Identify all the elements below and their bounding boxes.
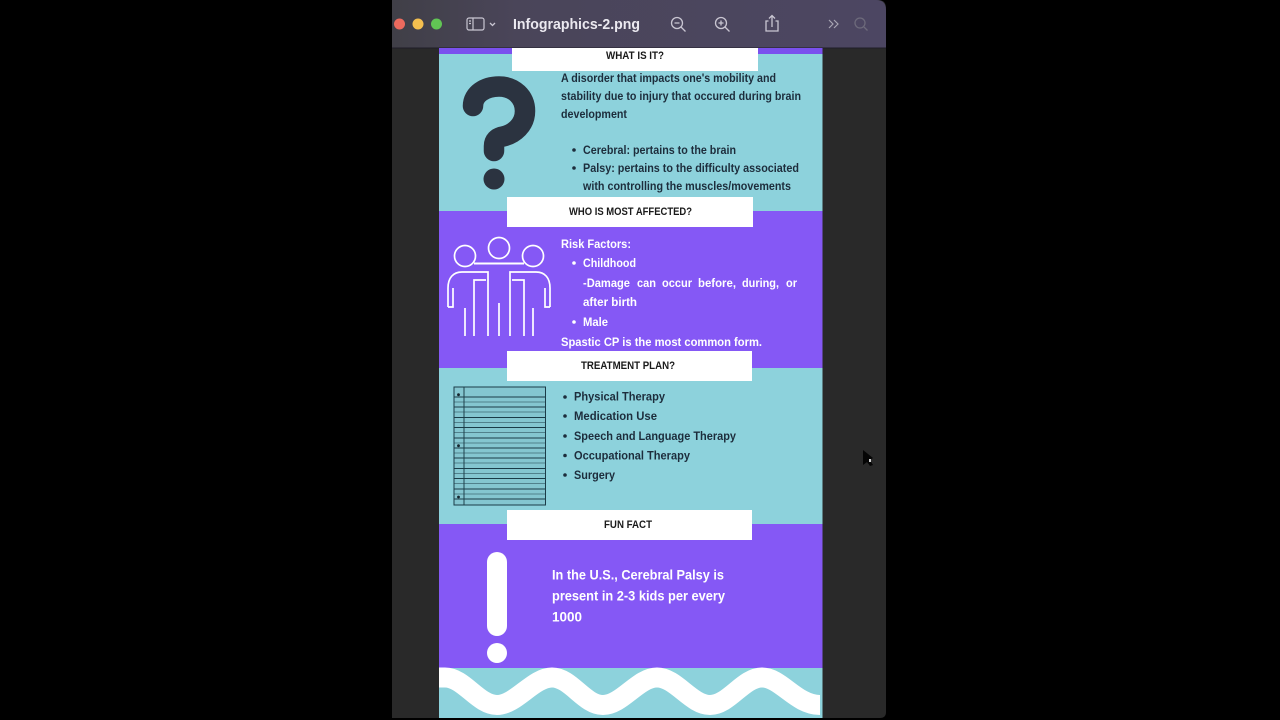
risk factors text: Male [583,315,608,329]
risk factors text: -Damage [583,276,630,290]
treatment list: Surgery [574,468,615,482]
risk factors text: Spastic CP is the most common form. [561,335,762,349]
fun fact text: In the U.S., Cerebral Palsy is [552,566,724,582]
risk factors text: before, [698,276,736,290]
heading: what is it: WHAT IS IT? [606,50,664,62]
section: treatment plan [439,351,822,524]
icon: zoom out [672,18,686,32]
risk factors text: after birth [583,295,637,309]
risk factors text [561,237,797,349]
heading: fun fact: FUN FACT [604,519,652,531]
icon: exclamation mark [487,552,507,663]
risk factors text: occur [662,276,692,290]
heading: what is it [512,48,758,71]
definition text [561,71,801,193]
icon: sidebar toggle [467,18,495,30]
icon: more chevrons [829,20,838,28]
risk factors text: Risk Factors: [561,237,631,251]
treatment list: Speech and Language Therapy [574,429,736,443]
definition text: A disorder that impacts one's mobility and [561,71,776,85]
heading: fun fact [507,510,752,540]
risk factors text: Childhood [583,256,636,270]
section: who is most affected [439,197,822,368]
window title: Infographics-2.png [513,17,640,33]
risk factors text: or [786,276,797,290]
icon: search [855,18,868,30]
definition text: stability due to injury that occured during brain [561,89,801,103]
definition text: Cerebral: pertains to the brain [583,143,736,157]
icon: share [766,16,778,31]
definition text: Palsy: pertains to the difficulty associated [583,161,799,175]
icon: zoom in [716,18,730,32]
fun fact text: 1000 [552,608,582,624]
heading: treatment plan: TREATMENT PLAN? [581,360,675,372]
window controls [394,18,442,30]
risk factors text: can [637,276,656,290]
icon: question mark [473,86,525,190]
fun fact text [552,566,725,624]
heading: who is most affected [507,197,753,227]
viewer window [392,0,886,718]
definition text: with controlling the muscles/movements [582,179,791,193]
treatment list [563,390,736,482]
treatment list: Occupational Therapy [574,448,690,462]
title bar [392,0,886,48]
treatment list: Medication Use [574,409,657,423]
section: fun fact [439,510,822,668]
infographic page [439,48,822,718]
definition text: development [561,107,627,121]
treatment list: Physical Therapy [574,390,665,404]
risk factors text: during, [742,276,779,290]
section: what is it [439,48,822,211]
fun fact text: present in 2-3 kids per every [552,588,725,604]
icon: group of people [448,238,550,336]
footer band with wave [439,668,822,718]
icon: lined notebook page [454,387,546,505]
heading: treatment plan [507,351,752,381]
icon: mouse cursor [863,450,873,466]
heading: who is most affected: WHO IS MOST AFFECTED? [569,206,692,218]
